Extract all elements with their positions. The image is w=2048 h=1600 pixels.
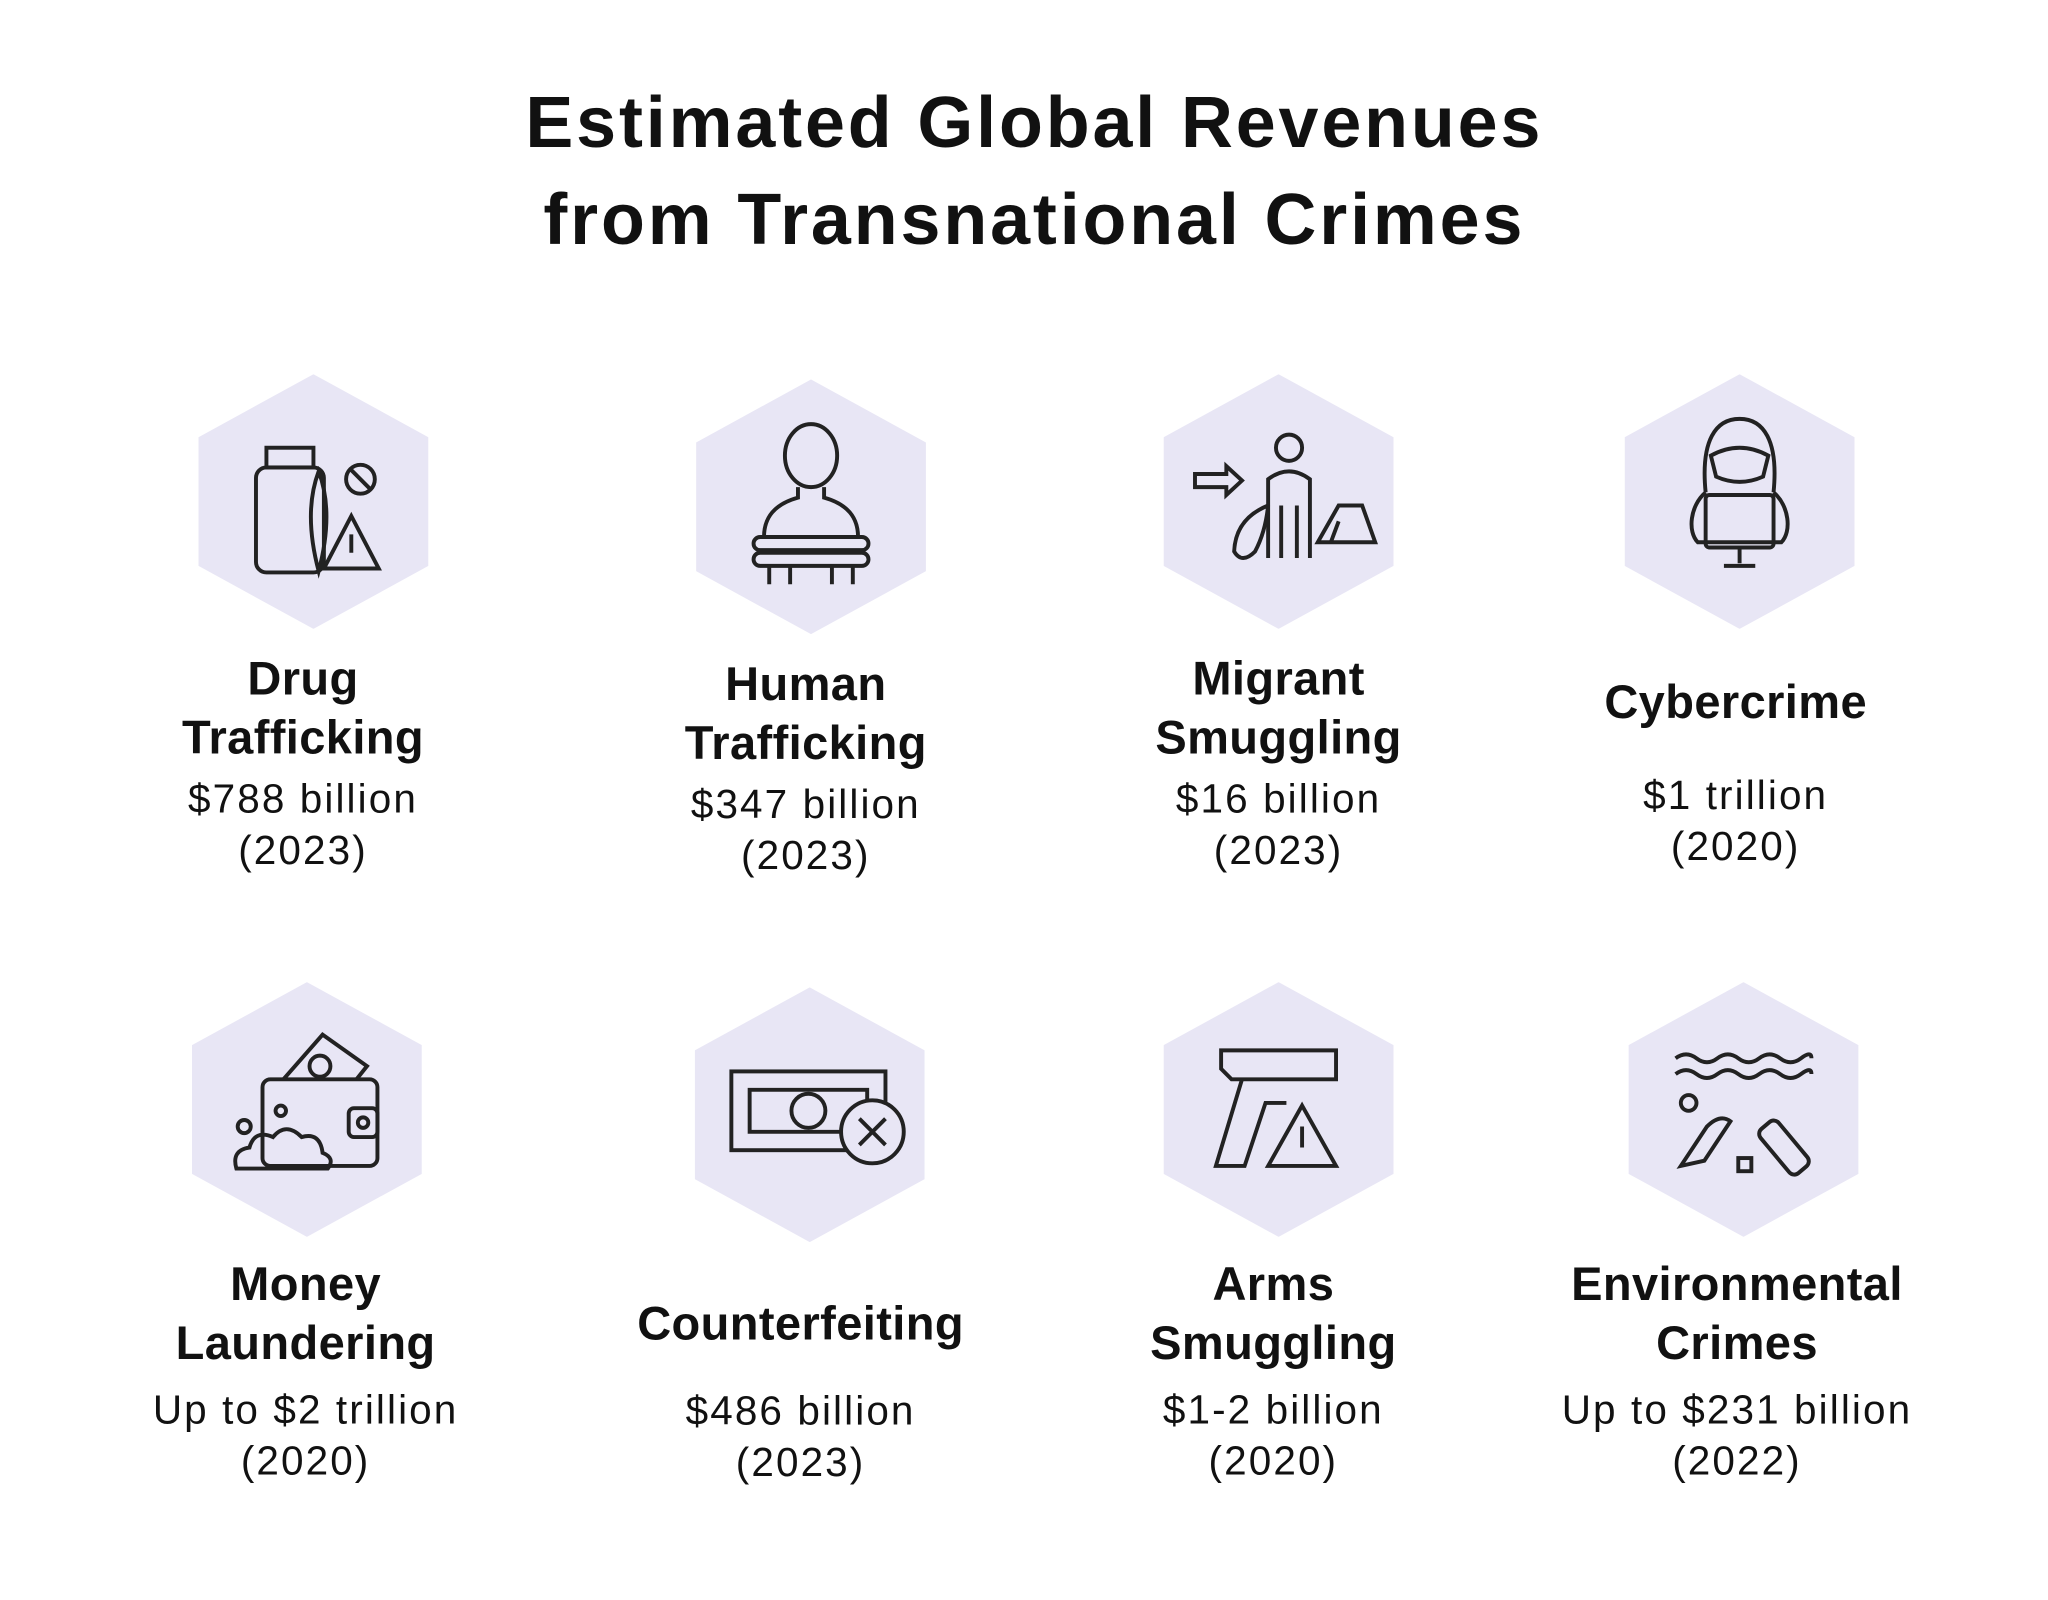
hexagon: migrant smuggling (1164, 374, 1394, 629)
label: migrant smuggling: $16 billion (1176, 776, 1381, 822)
label: drug trafficking: Trafficking (182, 710, 424, 764)
label: human trafficking: Human (725, 656, 886, 710)
label: cybercrime: Cybercrime (1604, 675, 1867, 729)
label: migrant smuggling: (2023) (1214, 827, 1343, 873)
hexagon: cybercrime (1624, 374, 1854, 629)
label: money laundering: (2020) (241, 1438, 370, 1484)
label: drug trafficking: $788 billion (188, 776, 418, 822)
label: cybercrime: $1 trillion (1643, 772, 1828, 818)
label: human trafficking: (2023) (741, 832, 871, 878)
label: migrant smuggling (1155, 651, 1402, 873)
label: arms smuggling (1150, 1257, 1397, 1484)
label: environmental crimes: (2022) (1672, 1438, 1802, 1484)
title: Estimated Global Revenues (525, 81, 1543, 163)
label: counterfeiting (637, 1296, 964, 1485)
label: money laundering: Up to $2 trillion (153, 1387, 458, 1432)
title: from Transnational Crimes (543, 179, 1525, 260)
label: cybercrime: (2020) (1671, 823, 1800, 869)
label: migrant smuggling: Smuggling (1155, 710, 1402, 764)
label: migrant smuggling: Migrant (1192, 651, 1365, 705)
title (525, 81, 1543, 260)
hexagon: arms smuggling (1164, 982, 1394, 1237)
label: arms smuggling: Arms (1212, 1257, 1334, 1310)
label: environmental crimes: Up to $231 billion (1562, 1387, 1912, 1432)
label: cybercrime (1604, 675, 1867, 869)
label: environmental crimes (1562, 1257, 1912, 1484)
label: human trafficking (685, 656, 927, 878)
label: human trafficking: Trafficking (685, 716, 927, 769)
label: drug trafficking: (2023) (238, 827, 368, 873)
label: human trafficking: $347 billion (691, 781, 921, 827)
label: arms smuggling: Smuggling (1150, 1316, 1397, 1369)
label: arms smuggling: $1-2 billion (1163, 1387, 1384, 1432)
hexagon: human trafficking (696, 380, 926, 634)
label: money laundering (153, 1257, 458, 1484)
hexagon: drug trafficking (198, 374, 428, 629)
label: money laundering: Laundering (176, 1316, 436, 1369)
label: environmental crimes: Crimes (1656, 1316, 1818, 1369)
label: counterfeiting: Counterfeiting (637, 1296, 964, 1350)
label: counterfeiting: $486 billion (686, 1388, 916, 1434)
hexagon: money laundering (192, 982, 422, 1237)
hexagon: counterfeiting (695, 988, 924, 1242)
label: drug trafficking (182, 651, 424, 873)
label: arms smuggling: (2020) (1209, 1438, 1338, 1484)
hexagon: environmental crimes (1628, 982, 1858, 1237)
label: money laundering: Money (230, 1257, 381, 1310)
label: environmental crimes: Environmental (1571, 1257, 1903, 1310)
label: counterfeiting: (2023) (736, 1439, 865, 1485)
label: drug trafficking: Drug (247, 651, 359, 705)
